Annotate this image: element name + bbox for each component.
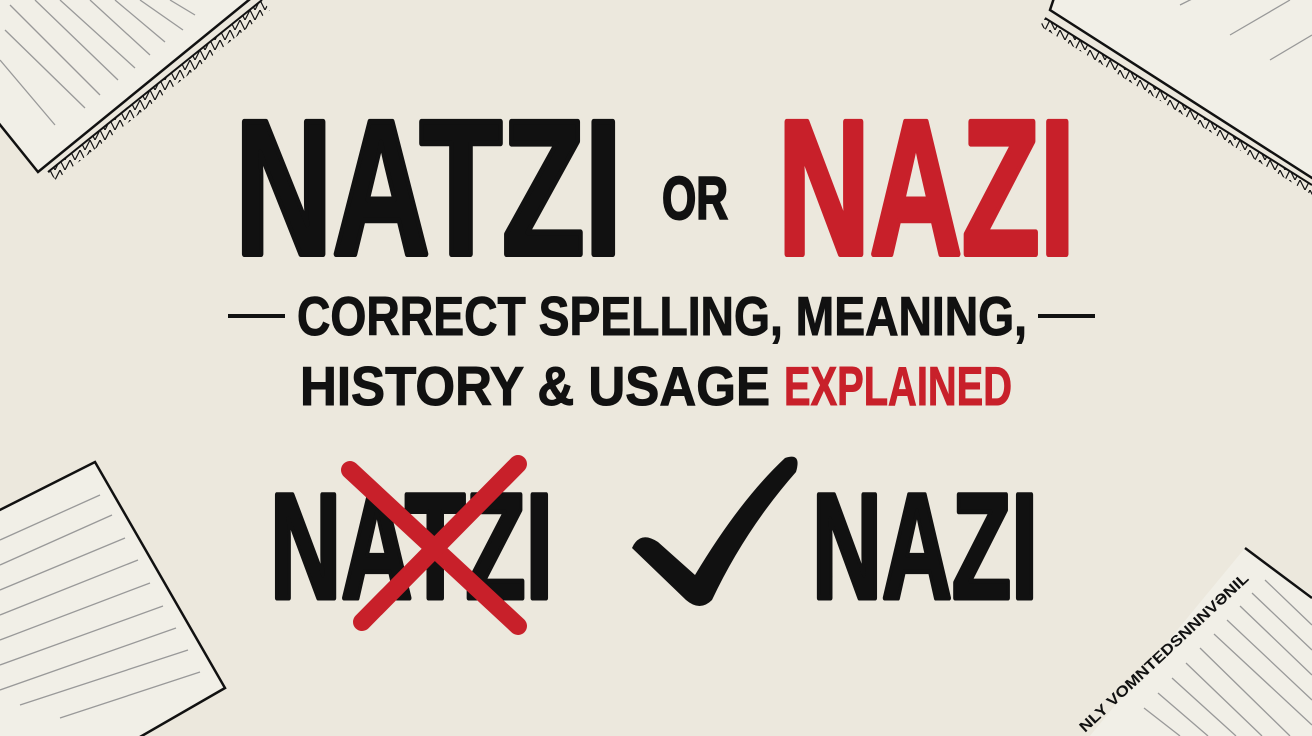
title: NATZI: [235, 80, 622, 295]
icon: checkmark: [632, 457, 798, 606]
title: [235, 80, 1075, 295]
paper: top-right: [1040, 0, 1312, 195]
paper: top-left: [0, 0, 270, 180]
subtitle: EXPLAINED: [784, 355, 1012, 417]
subtitle: HISTORY & USAGE: [300, 355, 770, 417]
wrong spelling crossed out: [270, 462, 553, 630]
title: NAZI: [778, 80, 1075, 295]
title: OR: [662, 165, 728, 232]
paper: bottom-left: [0, 462, 225, 736]
wrong spelling crossed out: NATZI: [270, 462, 553, 630]
subtitle: [228, 285, 1095, 417]
paper: bottom-right: NLY VOMNTEDSNNNVƏNIL: [1076, 570, 1252, 736]
subtitle: CORRECT SPELLING, MEANING,: [297, 285, 1027, 347]
correct spelling: NAZI: [812, 462, 1038, 630]
paper: bottom-right: [1070, 548, 1312, 736]
